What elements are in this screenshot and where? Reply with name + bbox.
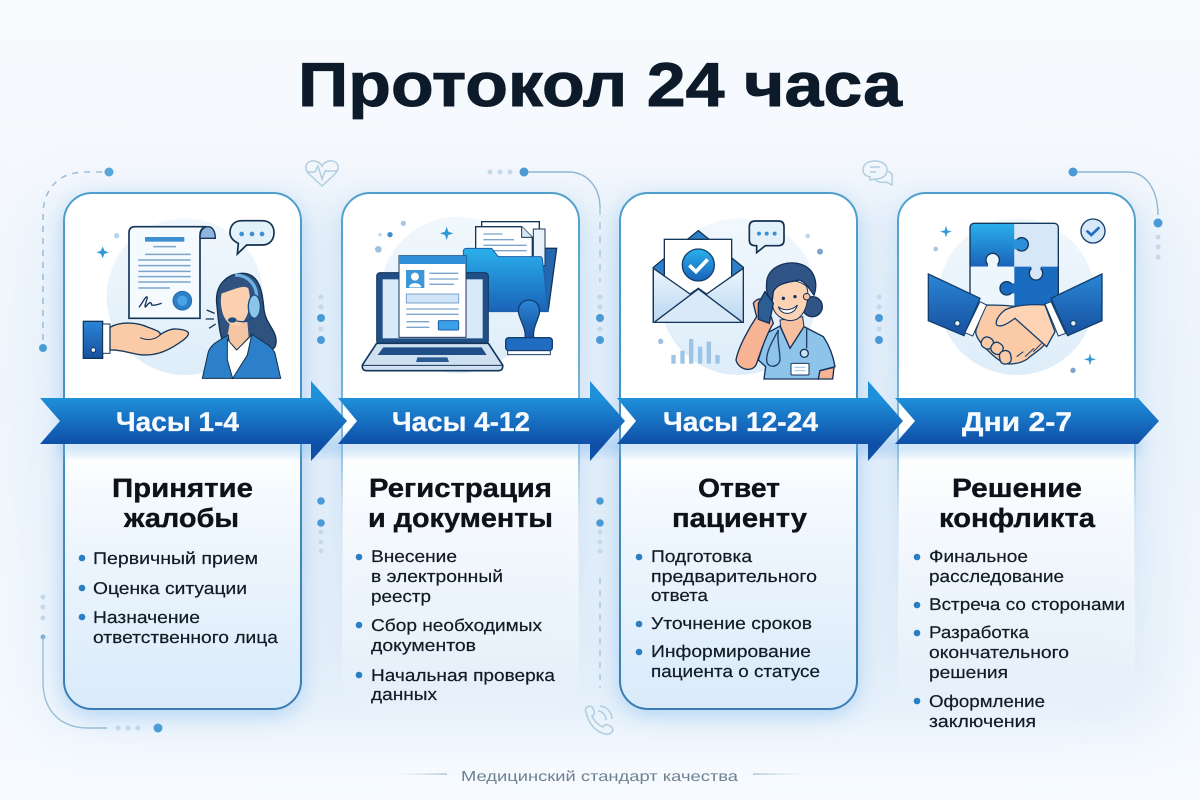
arrow: hours 4-12: Часы 4-12 [392, 407, 530, 437]
bullets: card 2: реестр [371, 587, 431, 606]
connector: top left dashed line [39, 168, 114, 352]
bullets: card 1 [79, 549, 279, 647]
timeline ribbon [40, 381, 1159, 461]
speech bubble [749, 221, 784, 253]
document [129, 227, 215, 318]
bullets: card 3: Подготовка [651, 547, 753, 566]
icon: phone [585, 706, 613, 734]
arrow: hours 1-4 [40, 381, 347, 461]
arrow: days 2-7 [895, 398, 1159, 444]
speech bubble [230, 221, 274, 254]
connector: bottom left [40, 594, 162, 732]
title: Протокол 24 часа [298, 51, 903, 120]
bullets: card 3: Уточнение сроков [651, 614, 812, 633]
operator woman [202, 273, 281, 378]
bullets: card 4: решения [929, 663, 1008, 682]
nurse [736, 263, 835, 379]
bullets: card 2: Начальная проверка [371, 666, 556, 685]
arrow: hours 4-12 [338, 381, 625, 461]
form [399, 256, 466, 337]
arrow: days 2-7: Дни 2-7 [962, 407, 1072, 437]
heading: card 4: конфликта [939, 503, 1095, 533]
arrow: hours 12-24: Часы 12-24 [663, 407, 818, 437]
card 3 background [620, 193, 857, 715]
card 2 background [342, 193, 579, 715]
sound bars [671, 339, 720, 364]
laptop [362, 273, 503, 371]
icon: chat bubbles [863, 161, 892, 185]
heading: card 3 [672, 473, 807, 533]
bullets: card 2: Внесение [371, 547, 457, 566]
bullets: card 4: заключения [929, 712, 1036, 731]
bullets: card 3: пациента о статусе [651, 662, 820, 681]
heading: card 4 [939, 473, 1095, 533]
illustration: envelope and nurse on the phone [653, 218, 835, 379]
heading: card 3: Ответ [698, 473, 780, 503]
heading: card 1: жалобы [123, 503, 239, 533]
bullets: card 4: Финальное [929, 547, 1028, 566]
bullets: card 1: ответственного лица [93, 628, 279, 647]
card 4 background [898, 193, 1135, 715]
bullets: card 4: Встреча со сторонами [929, 595, 1125, 614]
card 1 background [64, 193, 301, 715]
envelope [653, 231, 743, 322]
illustration: laptop, folder and stamp [362, 217, 557, 373]
panel: card 2 registration [342, 193, 579, 715]
heading: card 2: и документы [368, 503, 553, 533]
connector: top middle [488, 168, 600, 282]
heading: card 2: Регистрация [369, 473, 552, 503]
illustration: complaint hand-over and operator [83, 218, 281, 378]
folder with papers [463, 222, 557, 312]
illustration: puzzle and handshake [928, 218, 1105, 375]
bullets: card 3: Информирование [651, 642, 811, 661]
panel: card 1 intake [64, 193, 301, 715]
bullets: card 1: Оценка ситуации [93, 579, 247, 598]
bullets: card 4: Разработка [929, 623, 1030, 642]
bullets: card 3: предварительного [651, 567, 817, 586]
footer caption: Медицинский стандарт качества [461, 769, 739, 785]
heading: card 1: Принятие [112, 473, 253, 503]
heading: card 2 [368, 473, 553, 533]
bullets: card 2: данных [371, 685, 438, 704]
arrow: hours 12-24 [617, 381, 903, 461]
panel: card 4 resolution [898, 193, 1135, 731]
puzzle [970, 223, 1058, 313]
bullets: card 2 [356, 547, 556, 704]
stamp [506, 300, 552, 355]
bullets: card 2: Сбор необходимых [371, 616, 543, 635]
bullets: card 4: окончательного [929, 643, 1069, 662]
bullets: card 1: Первичный прием [93, 549, 258, 568]
bullets: card 2: в электронный [371, 567, 503, 586]
heading: card 3: пациенту [672, 503, 807, 533]
bullets: card 4: расследование [929, 567, 1064, 586]
bullets: card 4 [914, 547, 1125, 731]
heading: card 4: Решение [952, 473, 1082, 503]
giving hand [83, 321, 188, 358]
bullets: card 3 [636, 547, 820, 681]
dots between cards [317, 294, 883, 688]
check badge [1081, 219, 1105, 243]
bullets: card 2: документов [371, 636, 476, 655]
icon: heart with pulse [306, 161, 338, 186]
arrow: hours 1-4: Часы 1-4 [116, 407, 239, 437]
bullets: card 4: Оформление [929, 692, 1045, 711]
connector: top right [1068, 168, 1162, 260]
bullets: card 3: ответа [651, 586, 709, 605]
heading: card 1 [112, 473, 253, 533]
panel: card 3 patient reply [620, 193, 857, 715]
bullets: card 1: Назначение [93, 608, 200, 627]
handshake [928, 274, 1102, 365]
